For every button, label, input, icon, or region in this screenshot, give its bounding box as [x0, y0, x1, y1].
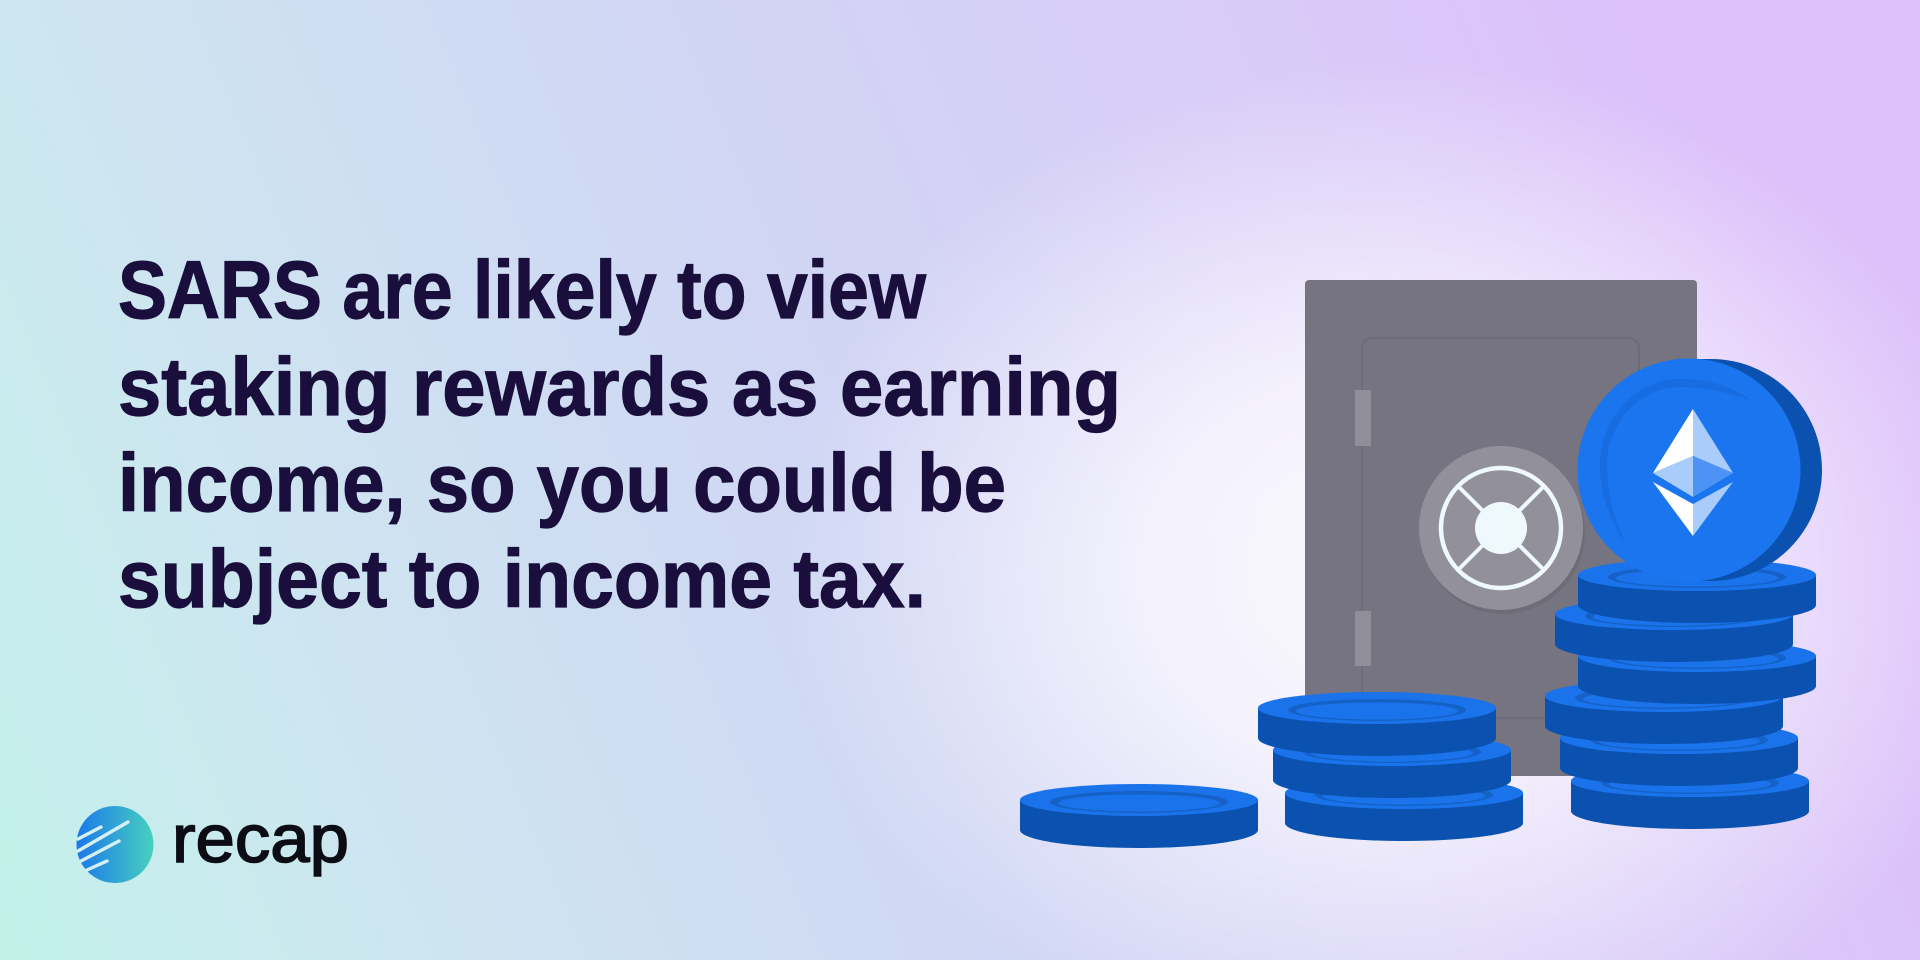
middle coin stack — [1258, 692, 1523, 841]
logo wordmark: recap — [172, 801, 349, 877]
heading: subject to income tax. — [118, 534, 926, 625]
heading: income, so you could be — [118, 438, 1006, 529]
coin on floor — [1020, 784, 1258, 848]
safe door outline — [1362, 338, 1639, 718]
heading: staking rewards as earning — [118, 342, 1121, 433]
heading — [118, 245, 1121, 625]
logo: recap — [76, 801, 349, 883]
icon: recap circle mark — [76, 806, 154, 883]
safe body — [1305, 280, 1697, 776]
safe hinges — [1355, 390, 1371, 666]
illustration: safe — [1305, 280, 1697, 776]
safe dial — [1419, 446, 1585, 614]
ethereum logo — [1653, 409, 1733, 536]
tall coin stack — [1545, 559, 1816, 829]
icon: ethereum coin — [1578, 358, 1822, 582]
heading: SARS are likely to view — [118, 245, 926, 336]
